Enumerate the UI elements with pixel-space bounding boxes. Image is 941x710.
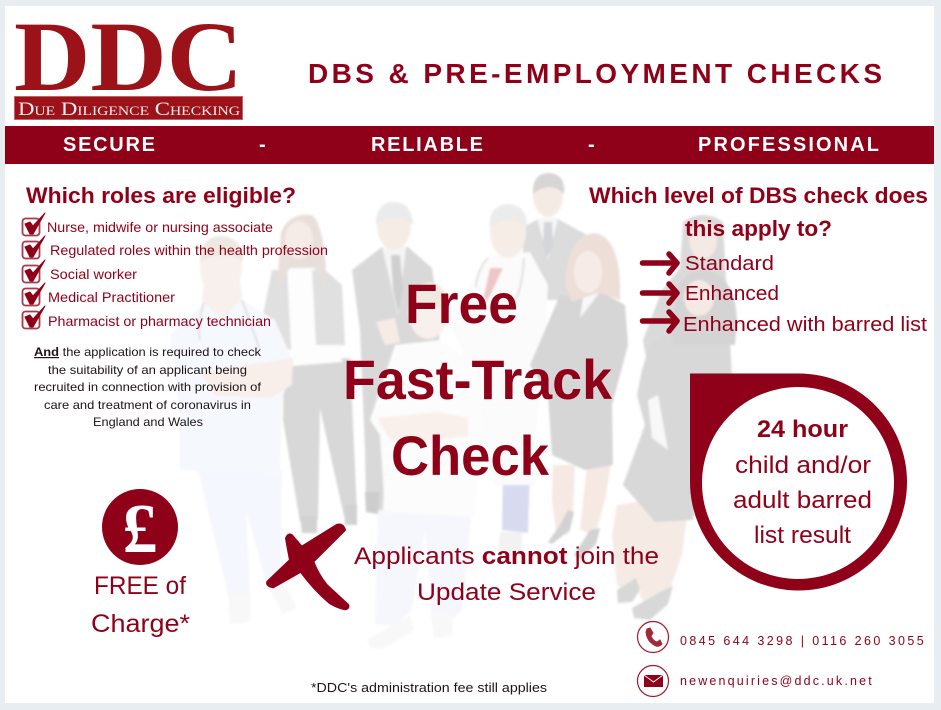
checklist item: regulated roles [22, 236, 328, 258]
checklist item: medical practitioner: Medical Practitioner [48, 289, 175, 305]
checklist item: pharmacist: Pharmacist or pharmacy technician [48, 313, 271, 329]
list of DBS check levels [642, 253, 927, 336]
banner: secure reliable professional: - [588, 134, 595, 156]
text block: and the application requirement: And the application is required to check [34, 345, 262, 359]
text block: and the application requirement: care and treatment of coronavirus in [44, 398, 251, 412]
callout: 24 hour barred list result [690, 374, 907, 590]
arrow: enhanced with barred list [642, 312, 677, 331]
checklist of eligible roles [22, 213, 328, 329]
icon: pound coin [102, 489, 178, 568]
person: older man in black suit [352, 202, 440, 514]
person: female nurse in the front [367, 282, 483, 648]
person: male nurse in scrubs on the left [170, 236, 297, 624]
banner: secure reliable professional: SECURE [63, 134, 155, 156]
text block: and the application requirement [34, 345, 262, 429]
icon: pound coin: £ [122, 491, 158, 568]
person: red-haired woman in black suit [530, 233, 628, 560]
person: woman in grey jacket [262, 215, 357, 533]
text block: and the application requirement: recruited in connection with provision of [34, 380, 262, 394]
callout: 24 hour barred list result: 24 hour [757, 416, 848, 443]
callout: 24 hour barred list result: child and/or [735, 452, 871, 479]
background photo: group of healthcare professionals [170, 173, 737, 648]
pound icon and free of charge: FREE of [94, 572, 186, 600]
checklist item: pharmacist [22, 306, 271, 329]
heading: which level of DBS check: Which level of DBS check does [589, 183, 928, 208]
footnote: *DDC's administration fee still applies [311, 680, 548, 695]
list of DBS check levels: Enhanced with barred list [683, 314, 927, 336]
checklist item: medical practitioner [22, 283, 175, 306]
text block: applicants cannot join: Applicants cannot join the [354, 543, 659, 570]
main headline: free fast-track check: Fast-Track [343, 348, 613, 411]
callout: 24 hour barred list result: list result [754, 522, 851, 549]
contact: email: newenquiries@ddc.uk.net [680, 674, 874, 688]
checklist item: social worker [22, 260, 137, 282]
title: DBS & PRE-EMPLOYMENT CHECKS [308, 58, 882, 89]
main headline: free fast-track check: Check [391, 424, 550, 487]
arrow: standard [642, 254, 677, 273]
text block: applicants cannot join: Update Service [417, 579, 596, 606]
person: back woman on the right [643, 215, 730, 380]
person: front woman on the right [612, 270, 737, 620]
pound icon and free of charge: Charge* [91, 610, 190, 638]
heading: which roles are eligible: Which roles are eligible? [26, 183, 296, 208]
person: doctor in white coat [447, 204, 548, 555]
banner: secure reliable professional: RELIABLE [371, 134, 483, 156]
logo: DDC Due Diligence Checking: DDC [14, 1, 243, 112]
contact: email [638, 666, 874, 696]
banner: secure reliable professional: PROFESSIONAL [698, 134, 879, 156]
heading: which level of DBS check: this apply to? [685, 216, 832, 241]
icon: envelope [644, 675, 663, 687]
heading: which level of DBS check [589, 183, 928, 241]
list of DBS check levels: Standard [685, 253, 774, 275]
checklist item: social worker: Social worker [50, 266, 137, 282]
main headline: free fast-track check: Free [405, 272, 518, 335]
callout: 24 hour barred list result: adult barred [733, 487, 872, 514]
contact: phone: 0845 644 3298 | 0116 260 3055 [680, 634, 926, 648]
contact: phone [638, 622, 926, 652]
main headline: free fast-track check [343, 272, 613, 487]
list of DBS check levels: Enhanced [685, 283, 779, 305]
checklist item: regulated roles: Regulated roles within the health profession [50, 242, 328, 258]
banner: secure reliable professional [5, 126, 934, 164]
person: young man in dark suit [522, 173, 592, 300]
arrow: enhanced [642, 284, 677, 303]
icon: phone handset [646, 628, 662, 646]
checklist item: nurse: Nurse, midwife or nursing associate [47, 219, 273, 235]
icon: cross mark [267, 525, 348, 609]
text block: and the application requirement: the suitability of an applicant being [48, 363, 247, 377]
checklist item: nurse [22, 213, 273, 236]
logo tagline box: Due Diligence Checking [18, 99, 240, 120]
pound icon and free of charge [91, 489, 190, 638]
banner: secure reliable professional: - [259, 134, 266, 156]
text block: and the application requirement: England and Wales [93, 415, 203, 429]
text block: applicants cannot join [354, 543, 659, 606]
